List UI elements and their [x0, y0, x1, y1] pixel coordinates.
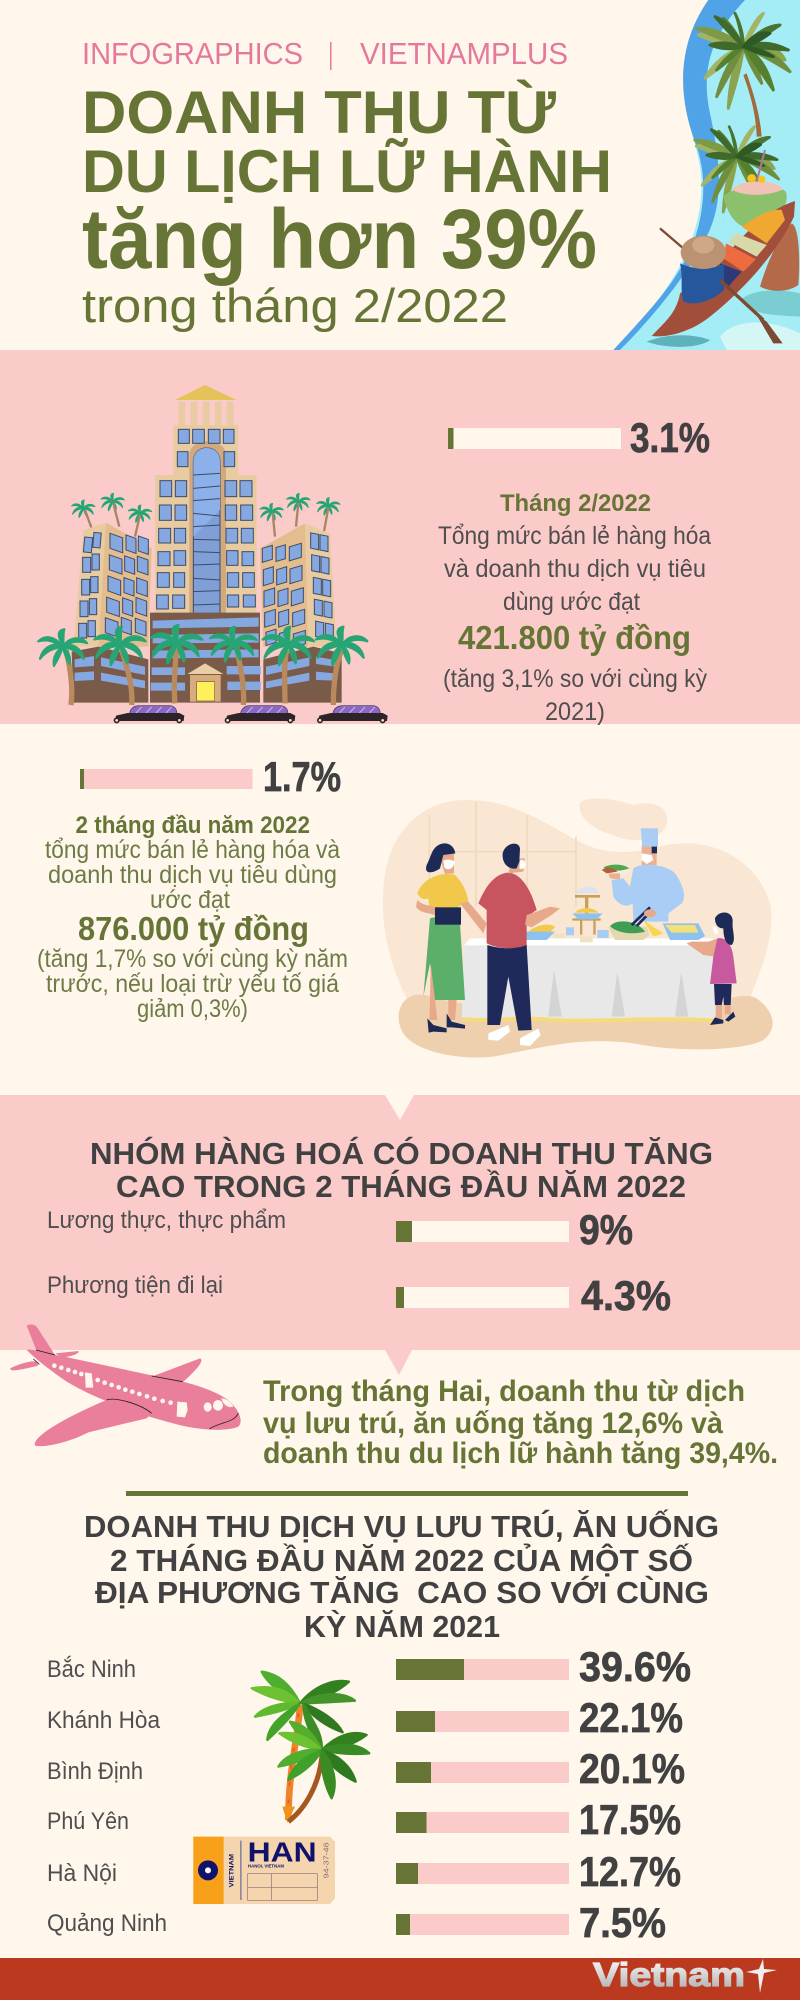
heading: goods groups: CAO TRONG 2 THÁNG ĐẦU NĂM 2022 — [116, 1169, 686, 1204]
text block: February 2022: và doanh thu dịch vụ tiêu — [444, 555, 706, 583]
heading: localities: KỲ NĂM 2021 — [304, 1609, 500, 1644]
icon: luggage tag HAN: VIETNAM — [229, 1854, 236, 1887]
kicker: INFOGRAPHICS | VIETNAMPLUS — [82, 36, 568, 71]
row: Bắc Ninh: 39.6% — [579, 1643, 691, 1690]
logo: Vietnam+ — [593, 1956, 777, 1993]
heading: localities: 2 THÁNG ĐẦU NĂM 2022 CỦA MỘT SỐ — [110, 1542, 693, 1578]
title: DU LỊCH LỮ HÀNH — [82, 138, 612, 205]
text block: first two months of 2022: giảm 0,3%) — [137, 995, 248, 1023]
row: Hà Nội: Hà Nội — [47, 1860, 117, 1887]
progress bar: 1.7% — [80, 753, 341, 800]
row: Bắc Ninh: Bắc Ninh — [47, 1656, 136, 1683]
row: food: 9% — [579, 1206, 633, 1253]
text block: February 2022: 421.800 tỷ đồng — [458, 619, 691, 656]
footer band with Vietnam+ logo — [0, 1956, 800, 2000]
text block: first two months of 2022: doanh thu dịch vụ tiêu dùng — [48, 861, 337, 889]
callout: February services and travel revenue: Trong tháng Hai, doanh thu từ dịch — [263, 1375, 745, 1408]
heading: goods groups: NHÓM HÀNG HOÁ CÓ DOANH THU TĂNG — [90, 1135, 713, 1171]
icon: pink airplane — [10, 1325, 241, 1446]
panel: goods groups with high revenue — [0, 1095, 800, 1375]
illustration: floating market with palm trees — [613, 0, 800, 350]
text block: February 2022: dùng ước đạt — [503, 588, 640, 616]
text block: first two months of 2022: trước, nếu loại trừ yếu tố giá — [46, 970, 339, 998]
title — [82, 79, 612, 332]
text block: February 2022: 2021) — [545, 698, 605, 726]
row: transport: Phương tiện đi lại — [47, 1272, 223, 1299]
kicker: INFOGRAPHICS | VIETNAMPLUS: INFOGRAPHICS — [82, 36, 303, 71]
text block: first two months of 2022: (tăng 1,7% so với cùng kỳ năm — [37, 945, 348, 973]
text block: first two months of 2022: ước đạt — [150, 886, 230, 914]
row: Khánh Hòa: 22.1% — [579, 1694, 683, 1741]
progress bar: 3.1% — [448, 414, 710, 461]
text block: February 2022: (tăng 3,1% so với cùng kỳ — [443, 665, 707, 693]
text block: February 2022 — [438, 490, 711, 726]
callout: February services and travel revenue: vụ lưu trú, ăn uống tăng 12,6% và — [263, 1407, 723, 1440]
callout: February services and travel revenue: doanh thu du lịch lữ hành tăng 39,4%. — [263, 1437, 778, 1470]
icon: luggage tag HAN — [193, 1837, 335, 1904]
panel: accommodation and food revenue by locality — [47, 1508, 719, 1946]
row: Bắc Ninh — [47, 1643, 691, 1690]
title: DOANH THU TỪ — [82, 79, 556, 146]
row: Hà Nội — [47, 1848, 681, 1895]
text block: first two months of 2022: 2 tháng đầu năm 2022 — [76, 812, 310, 839]
row: Bình Định — [47, 1745, 685, 1792]
row: Phú Yên: Phú Yên — [47, 1808, 129, 1835]
row: food: Lương thực, thực phẩm — [47, 1207, 286, 1234]
row: Phú Yên: 17.5% — [579, 1796, 681, 1843]
row: Quảng Ninh — [47, 1899, 666, 1946]
heading: localities — [84, 1508, 719, 1644]
row: Phú Yên — [47, 1796, 681, 1843]
panel: first two months retail revenue — [37, 753, 773, 1057]
title: trong tháng 2/2022 — [82, 279, 508, 332]
illustration: buffet service — [383, 798, 773, 1057]
row: transport: 4.3% — [581, 1272, 671, 1319]
text block: February 2022: Tổng mức bán lẻ hàng hóa — [438, 522, 711, 550]
row: transport — [47, 1272, 671, 1319]
logo: Vietnam+: Vietnam — [593, 1956, 745, 1993]
progress bar: 1.7%: 1.7% — [263, 753, 341, 800]
text block: first two months of 2022: 876.000 tỷ đồng — [78, 910, 309, 947]
text block: first two months of 2022: tổng mức bán lẻ hàng hóa và — [45, 836, 340, 864]
row: Khánh Hòa: Khánh Hòa — [47, 1707, 161, 1734]
icon: palm trees — [252, 1672, 369, 1823]
row: Bình Định: Bình Định — [47, 1758, 143, 1785]
row: Quảng Ninh: Quảng Ninh — [47, 1910, 167, 1937]
row: Quảng Ninh: 7.5% — [579, 1899, 666, 1946]
row: food — [47, 1206, 633, 1253]
icon: luggage tag HAN: HAN — [248, 1837, 317, 1868]
row: Khánh Hòa — [47, 1694, 683, 1741]
text block: first two months of 2022 — [37, 812, 348, 1023]
callout: February services and travel revenue — [263, 1375, 778, 1470]
progress bar: 3.1%: 3.1% — [630, 414, 710, 461]
title: tăng hơn 39% — [82, 192, 597, 286]
illustration: hotel — [38, 385, 388, 723]
icon: luggage tag HAN: 94-37-46 — [321, 1842, 330, 1878]
heading: localities: DOANH THU DỊCH VỤ LƯU TRÚ, ĂN UỐNG — [84, 1508, 719, 1544]
icon: luggage tag HAN: HANOI, VIETNAM — [248, 1863, 284, 1868]
panel: header — [82, 0, 800, 350]
kicker: INFOGRAPHICS | VIETNAMPLUS: VIETNAMPLUS — [360, 36, 568, 71]
row: Hà Nội: 12.7% — [579, 1848, 681, 1895]
text block: February 2022: Tháng 2/2022 — [500, 490, 651, 517]
row: Bình Định: 20.1% — [579, 1745, 685, 1792]
heading: localities: ĐỊA PHƯƠNG TĂNG CAO SO VỚI CÙNG — [95, 1574, 709, 1610]
panel: February 2022 retail revenue — [0, 350, 800, 726]
heading: goods groups — [90, 1135, 713, 1204]
